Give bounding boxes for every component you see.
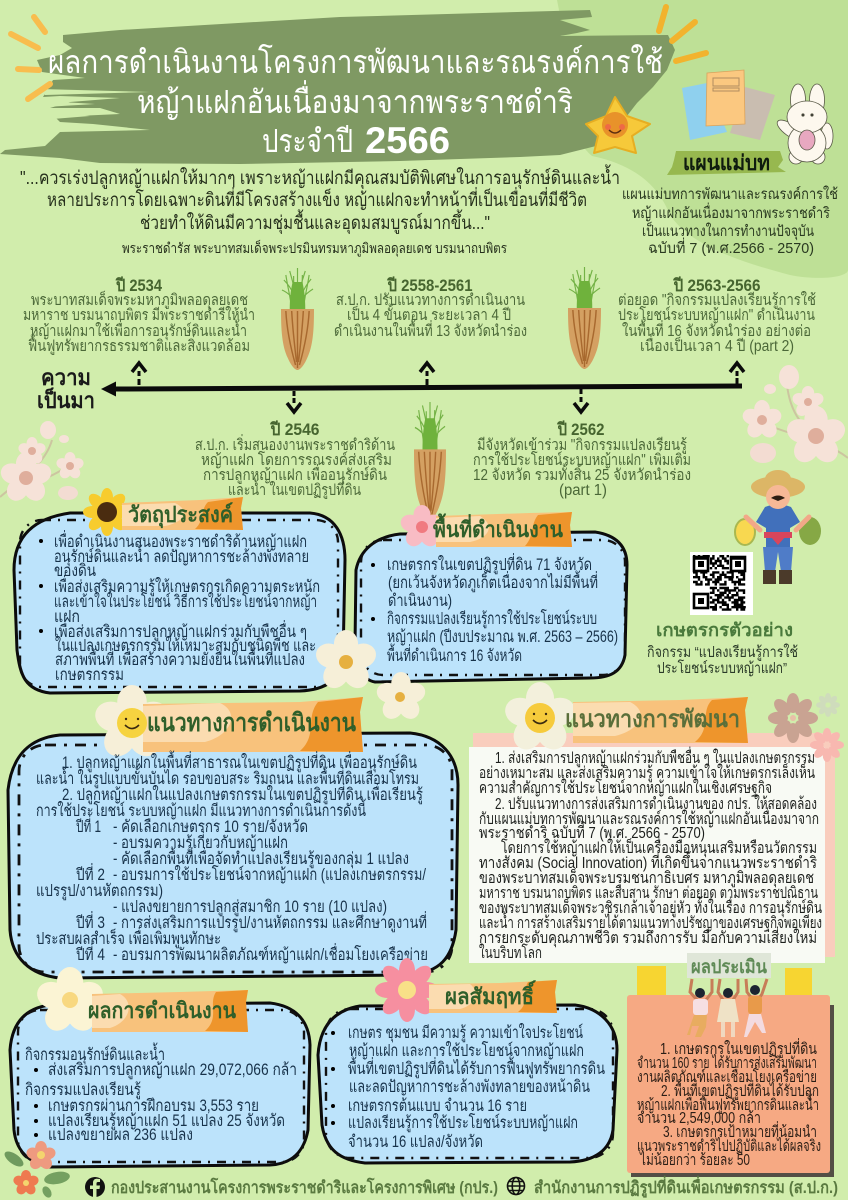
note shadow [631,1005,834,1177]
QR code [690,552,753,615]
guideline text: ปีที่ 4 [75,943,105,964]
guideline text: - แปลงขยายการปลูกสู่สมาชิก 10 ราย (10 แปลง) [113,898,387,917]
banner: วัตถุประสงค์ [128,502,233,529]
results text: กิจกรรมแปลงเรียนรู้ [25,1081,141,1100]
kids holding sign [687,979,767,1037]
icon: small daisy [374,672,428,723]
sun rays right [659,7,706,61]
objectives list [39,530,320,684]
evaluation text [637,1038,821,1169]
year 2534: พระบาทสมเด็จพระมหาภูมิพลอดุลยเดช [31,290,248,310]
banner: ผลการดำเนินงาน [88,998,236,1023]
objectives list: ของดิน [54,562,96,580]
operating area list: เกษตรกรในเขตปฏิรูปที่ดิน 71 จังหวัด [387,553,592,575]
year 2562: การใช้ประโยชน์ระบบหญ้าแฝก" เพิ่มเติม [473,449,691,469]
results text: แปลงขยายผล 236 แปลง [48,1126,193,1144]
icon: cream flower [34,967,106,1036]
pink backing paper [473,733,835,957]
objectives list: สภาพพื้นที่ เพื่อสร้างความยั่งยืนในพื้นที่แปลง [55,647,305,669]
objectives list: แฝก [54,608,80,626]
quote source: พระราชดำรัส พระบาทสมเด็จพระปรมินทรมหาภูมิพลอดุลยเดช บรมนาถบพิตร [122,239,507,257]
panel: outcomes [318,958,617,1163]
year 2562: (part 1) [559,482,607,499]
results text [25,1042,297,1144]
guideline text: แปรรูป/งานหัตถกรรม) [36,882,163,901]
year 2563-2566: เนื่องเป็นเวลา 4 ปี (part 2) [640,335,794,355]
guideline text: - การส่งเสริมการแปรรูป/งานหัตถกรรม และศึกษาดูงานที่ [113,911,427,933]
banner: ผลสัมฤทธิ์ [445,980,536,1009]
panel frame [318,1005,617,1163]
operating area list: หญ้าแฝก (ปีงบประมาณ พ.ศ. 2563 – 2566) [387,628,618,646]
quote block: ช่วยทำให้ดินมีความชุ่มชื้นและอุดมสมบูรณ์มากขึ้น..." [140,209,490,235]
master plan text [622,185,838,257]
timeline label: ความ [41,365,91,390]
banner [565,697,748,743]
year 2534: ปี 2534 [115,275,162,295]
title block [0,7,706,164]
year 2563-2566: ปี 2563-2566 [673,275,760,295]
guideline text: การใช้ประโยชน์ ระบบหญ้าแฝก มีแนวทางการดำเนินการดังนี้ [36,798,366,820]
objectives list: เพื่อส่งเสริมความรู้ให้เกษตรกรเกิดความตระหนัก [54,575,320,597]
footer decoration: flowers and leaves [2,1141,71,1199]
panel: objectives [14,488,345,693]
year 2558-2561: ปี 2558-2561 [387,275,472,295]
year 2546 [195,419,395,500]
banner [88,990,248,1032]
salmon note [627,995,830,1173]
outcomes list: แปลงเรียนรู้การใช้ประโยชน์ระบบหญ้าแฝก [348,1113,578,1133]
guideline text: 2. ปลูกหญ้าแฝกในแปลงเกษตรกรรมในเขตปฏิรูปที่ดิน เพื่อเรียนรู้ [62,783,423,805]
white paper [469,747,825,963]
icon: documents [682,70,775,140]
year 2546: ส.ป.ก. เริ่มสนองงานพระราชดำริด้าน [195,434,395,454]
year 2558-2561: เป็น 4 ขั้นตอน ระยะเวลา 4 ปี [347,303,511,324]
sun rays left [11,17,50,99]
panel: operating area [355,505,627,682]
results text: ส่งเสริมการปลูกหญ้าแฝก 29,072,066 กล้า [48,1061,297,1080]
icon: daisy between panels [313,630,379,693]
guideline text: - คัดเลือกเกษตรกร 10 ราย/จังหวัด [113,818,308,836]
outcomes list [331,1023,605,1151]
icon: vetiver root 3 [414,402,446,520]
objectives list: เพื่อส่งเสริมการปลูกหญ้าแฝกร่วมกับพืชอื่น ๆ [54,620,307,642]
tape yellow [637,966,666,1030]
icon: pale flower [816,693,840,717]
model farmer caption [647,643,798,677]
banner: แนวทางการดำเนินงาน [147,709,356,737]
guideline text: ปีที่ 3 [75,911,105,932]
objectives list: อนุรักษ์ดินและน้ำ ลดปัญหาการชะล้างพังทลาย [54,544,309,567]
outcomes list: จำนวน 16 แปลง/จังหวัด [348,1133,483,1151]
evaluation text: จำนวน 2,549,000 กล้า [637,1110,761,1127]
timeline label [37,365,95,413]
banner: แนวทางการพัฒนา [565,706,740,733]
operating area list: กิจกรรมแปลงเรียนรู้การใช้ประโยชน์ระบบ [387,609,597,629]
timeline arrow [101,382,742,396]
evaluation text: ไม่น้อยกว่า ร้อยละ 50 [638,1151,750,1169]
year 2558-2561 [334,275,527,340]
operating area list: (ยกเว้นจังหวัดภูเก็ตเนื่องจากไม่มีพื้นที่ [388,570,598,593]
guideline text: ประสบผลสำเร็จ เพื่อเพิ่มพูนทักษะ [36,927,221,949]
blossoms right [741,365,848,467]
icon: daisy petals [501,682,579,755]
year 2562: 12 จังหวัด รวมทั้งสิ้น 25 จังหวัดนำร่อง [473,463,691,484]
model farmer heading: เกษตรกรตัวอย่าง [656,620,793,640]
panel: development guidelines [469,682,844,963]
guideline text: - อบรมการพัฒนาผลิตภัณฑ์หญ้าแฝก/เชื่อมโยงเครือข่าย [113,943,428,964]
icon: pink flower [810,728,844,762]
panel frame [10,1003,310,1167]
guideline text: และน้ำ ในรูปแบบขั้นบันได รอบขอบสระ ริมถนน และพื้นที่ดินเสื่อมโทรม [36,766,419,789]
development text [479,746,822,962]
QR code and model farmer [647,552,798,677]
icon: vetiver root 2 [568,267,601,369]
guideline text [36,750,428,964]
year 2534: หญ้าแฝกมาใช้เพื่อการอนุรักษ์ดินและน้ำ [30,319,247,341]
guideline text: - อบรมการใช้ประโยชน์จากหญ้าแฝก (แปลงเกษตรกรรม/ [113,865,426,884]
panel: implementation guidelines [8,685,458,978]
farmer illustration [735,470,821,584]
master plan panel [622,70,838,257]
model farmer caption: ประโยชน์ระบบหญ้าแฝก” [657,659,787,677]
blossoms left [0,421,85,505]
year 2558-2561: ดำเนินงานในพื้นที่ 13 จังหวัดนำร่อง [334,319,527,340]
icon: brown flower [768,693,818,743]
banner [433,512,572,547]
operating area list [371,553,618,665]
panel frame [355,532,627,682]
year 2546: หญ้าแฝก โดยการรณรงค์ส่งเสริม [201,451,392,469]
year 2534: มหาราช บรมนาถบพิตร มีพระราชดำรีให้นำ [23,306,255,324]
icon: globe [508,1178,524,1194]
outcomes list: และลดปัญหาการชะล้างพังทลายของหน้าดิน [349,1078,590,1096]
quote block: หลายประการโดยเฉพาะดินที่มีโครงสร้างแข็ง หญ้าแฝกจะทำหน้าที่เป็นเขื่อนที่มีชีวิต [47,187,587,211]
results text: แปลงเรียนรู้หญ้าแฝก 51 แปลง 25 จังหวัด [48,1112,285,1131]
panel: evaluation [627,953,834,1177]
quote block: "...ควรเร่งปลูกหญ้าแฝกให้มากๆ เพราะหญ้าแฝกมีคุณสมบัติพิเศษในการอนุรักษ์ดินและน้ำ [20,164,620,190]
up and down markers [132,363,744,412]
year 2562: ปี 2562 [557,419,604,439]
guideline text: 1. ปลูกหญ้าแฝกในพื้นที่สาธารณในเขตปฏิรูปที่ดิน เพื่ออนุรักษ์ดิน [62,750,417,773]
panel frame [14,513,345,693]
year 2546: ปี 2546 [270,419,320,439]
background blob top right [557,0,848,278]
development text: ในบริบทโลก [479,943,542,962]
year 2563-2566: ในพื้นที่ 16 จังหวัดนำร่อง อย่างต่อ [622,319,811,340]
guideline text: - อบรมความรู้เกี่ยวกับหญ้าแฝก [113,831,288,853]
icon: pink flower [398,505,446,550]
master plan text: ฉบับที่ 7 (พ.ศ.2566 - 2570) [648,237,814,257]
icon: daisy petals [91,685,173,762]
outcomes list: หญ้าแฝก และการใช้ประโยชน์จากหญ้าแฝก [349,1041,584,1060]
timeline [23,267,816,520]
development text: พระราชดำริ ฉบับที่ 7 (พ.ศ. 2566 - 2570) [479,821,705,842]
banner [143,697,363,752]
title text: หญ้าแฝกอันเนื่องมาจากพระราชดำริ [137,80,573,120]
body [756,504,800,548]
year 2563-2566: ต่อยอด "กิจกรรมแปลงเรียนรู้การใช้ [618,291,816,310]
icon: sunflower [83,488,131,536]
operating area list: ดำเนินงาน) [388,592,452,610]
year 2563-2566 [618,275,816,355]
icon: smiling face [117,708,147,738]
year 2562: มีจังหวัดเข้าร่วม "กิจกรรมแปลงเรียนรู้ [477,437,687,455]
results text: เกษตรกรผ่านการฝึกอบรม 3,553 ราย [48,1097,259,1115]
banner [429,980,557,1013]
title text [48,44,663,161]
evaluation text: 1. เกษตรกรในเขตปฏิรูปที่ดิน [660,1038,817,1059]
model farmer caption: กิจกรรม “แปลงเรียนรู้การใช้ [647,643,798,661]
outcomes list: เกษตรกรต้นแบบ จำนวน 16 ราย [348,1097,527,1115]
outcomes list: พื้นที่เขตปฏิรูปที่ดินได้รับการฟื้นฟูทรัพยากรดิน [348,1056,605,1079]
year 2546: การปลูกหญ้าแฝก เพื่ออนุรักษ์ดิน [203,464,387,485]
objectives list: และเข้าใจในประโยชน์ วิธีการใช้ประโยชน์จากหญ้า [54,592,317,611]
objectives list: ในแปลงเกษตรกรรมให้เหมาะสมกับชนิดพืช และ [55,636,316,655]
brush gaps [40,89,150,131]
banner: พื้นที่ดำเนินงาน [433,513,563,542]
footer text 1: กองประสานงานโครงการพระราชดำริและโครงการพิเศษ (กปร.) [111,1177,498,1197]
icon: facebook [85,1177,105,1197]
objectives list: เพื่อดำเนินงานสนองพระราชดำริด้านหญ้าแฝก [54,530,307,551]
year 2534: ฟื้นฟูทรัพยากรธรรมชาติและสิ่งแวดล้อม [28,334,250,356]
sign: ผลประเมิน [691,957,767,978]
icon: white rabbit [774,84,833,164]
title text: ประจำปี [262,123,353,159]
year 2558-2561: ส.ป.ก. ปรับแนวทางการดำเนินงาน [336,292,525,309]
icon: pink flower [375,958,439,1022]
title text: ผลการดำเนินงานโครงการพัฒนาและรณรงค์การใช้ [48,44,663,80]
results text: กิจกรรมอนุรักษ์ดินและน้ำ [25,1042,165,1065]
badge: master plan: แผนแม่บท [683,152,770,175]
icon: vetiver root 1 [281,268,314,370]
year 2562 [473,419,691,499]
durians [735,519,755,545]
title text: 2566 [365,120,450,161]
timeline label: เป็นมา [37,386,95,413]
panel: results [10,967,310,1167]
brush stroke behind title [0,10,675,164]
panel frame [8,733,458,978]
year 2534 [23,275,255,356]
year 2546: และน้ำ ในเขตปฏิรูปที่ดิน [228,478,361,500]
footer [85,1175,838,1199]
outcomes list: เกษตร ชุมชน มีความรู้ ความเข้าใจประโยชน์ [348,1023,583,1043]
guideline text: ปีที่ 2 [75,863,105,884]
hat and head [751,476,805,498]
guideline text: - คัดเลือกพื้นที่เพื่อจัดทำแปลงเรียนรู้ของกลุ่ม 1 แปลง [113,846,409,869]
objectives list: เกษตรกรรม [55,666,124,684]
icon: star flower with face [586,97,650,153]
operating area list: พื้นที่ดำเนินการ 16 จังหวัด [387,643,522,665]
quote block [20,164,620,257]
guideline text: ปีที่ 1 [75,815,101,836]
icon: smiling face [525,703,555,733]
